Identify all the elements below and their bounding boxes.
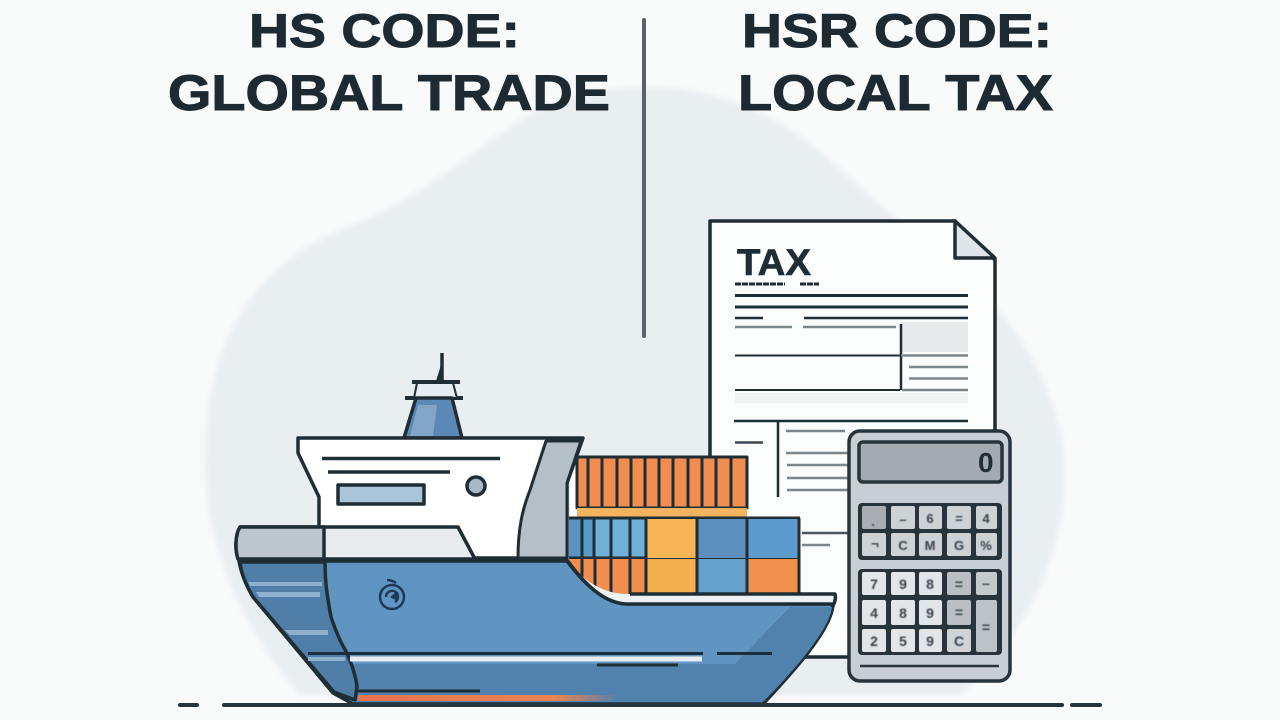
upper keypad: ¬ — [871, 536, 879, 551]
upper keypad: C — [898, 538, 908, 553]
lower keypad: C — [954, 633, 964, 649]
deck block — [236, 527, 475, 559]
porthole — [467, 477, 485, 495]
heading: HS code: HS CODE: — [249, 4, 520, 57]
lower keypad: 9 — [926, 633, 934, 649]
hull stripes — [308, 652, 772, 655]
lower keypad: 4 — [870, 605, 878, 621]
lower keypad: – — [982, 575, 990, 591]
lower hull shading — [350, 607, 832, 702]
lower keypad: = — [955, 576, 963, 592]
upper keypad: . — [871, 514, 875, 529]
background blob — [205, 87, 1065, 695]
top orange containers — [577, 457, 747, 508]
tax document — [710, 221, 995, 657]
lower keypad: 2 — [870, 633, 878, 649]
upper keypad: % — [980, 538, 992, 553]
ship — [236, 353, 835, 704]
upper keypad: 4 — [982, 511, 990, 526]
upper keypad: G — [954, 538, 964, 553]
ground line — [180, 703, 1100, 707]
bow panel — [240, 562, 357, 700]
upper keypad: M — [925, 538, 935, 553]
heading: HSR code: LOCAL TAX — [738, 65, 1053, 121]
heading: HS code — [168, 4, 610, 121]
lower keypad — [858, 569, 1002, 655]
lower keypad: 5 — [899, 633, 907, 649]
upper keypad: = — [955, 511, 963, 526]
lower keypad: 8 — [899, 605, 907, 621]
ship hull — [236, 527, 835, 704]
bridge lines — [322, 458, 500, 472]
lower keypad: 9 — [926, 605, 934, 621]
hull logo — [380, 580, 404, 609]
ship mast and funnel — [404, 353, 463, 438]
heading: HSR code: HSR CODE: — [742, 4, 1052, 57]
bridge window — [338, 485, 424, 504]
upper keypad — [858, 503, 1002, 560]
heading: HSR code — [738, 4, 1053, 121]
lower orange containers — [569, 559, 647, 595]
lower keypad: = — [955, 604, 963, 620]
document title: TAX — [737, 242, 811, 283]
colored block containers — [647, 519, 697, 558]
display digit: 0 — [978, 447, 994, 478]
fold corner — [955, 221, 995, 258]
heading: HS code: GLOBAL TRADE — [168, 65, 610, 121]
lower keypad: = — [982, 619, 990, 635]
upper keypad: – — [899, 512, 907, 527]
calculator — [849, 431, 1010, 681]
container stack — [569, 456, 800, 595]
deck white strip — [568, 561, 835, 604]
ship superstructure — [298, 438, 583, 558]
lower keypad: 7 — [870, 576, 878, 592]
upper keypad: 6 — [926, 511, 934, 526]
lower keypad: 9 — [899, 576, 907, 592]
document lines — [734, 284, 968, 533]
blue striped containers — [569, 518, 647, 558]
center divider — [642, 18, 646, 338]
lower keypad: 8 — [926, 576, 934, 592]
keel stripe — [358, 695, 620, 701]
calculator display — [859, 442, 1002, 482]
